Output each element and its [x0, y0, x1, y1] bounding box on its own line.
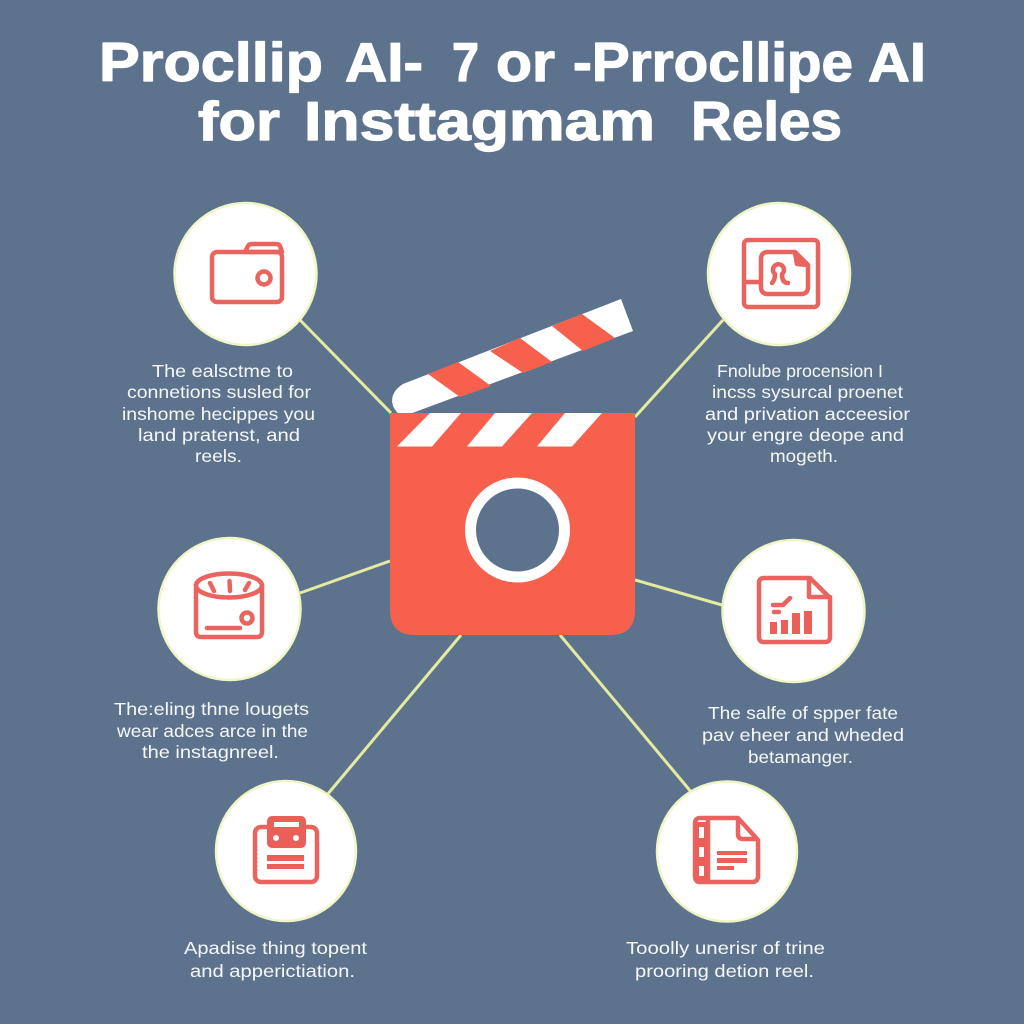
title: for [198, 90, 280, 152]
title: or [496, 31, 555, 93]
text block: middle right [702, 703, 904, 767]
text block: upper right [705, 361, 910, 466]
icon: folder [212, 244, 282, 302]
title: Insttagmam [304, 90, 655, 152]
text block: upper left: The ealsctme to [152, 361, 293, 381]
clapper body [390, 413, 635, 635]
icon: gauge drum [196, 574, 262, 637]
text block: middle left: wear adces arce in the [116, 721, 308, 741]
text block: middle left: The:eling thne lougets [114, 699, 309, 719]
node: clipboard [216, 781, 356, 921]
lens ring [470, 483, 564, 577]
node: framed document [708, 203, 850, 345]
central clapperboard [390, 299, 635, 635]
text block: lower left: Apadise thing topent [184, 938, 367, 958]
body stripes [397, 413, 602, 446]
node: gauge drum [158, 538, 300, 680]
text block: upper right: and privation acceesior [705, 404, 910, 424]
text block: upper left: inshome hecippes you [122, 404, 315, 424]
title [99, 31, 926, 152]
title: -Prrocllipe [573, 31, 853, 93]
clapper arm [392, 299, 633, 415]
icon: framed document [744, 240, 818, 307]
text block: lower right: Tooolly unerisr of trine [626, 938, 825, 958]
text block: upper left: connetions susled for [127, 382, 311, 402]
title: Reles [691, 90, 842, 152]
text block: upper right: Fnolube procension I [717, 361, 883, 381]
node: chart document [722, 540, 864, 682]
text block: upper right: mogeth. [770, 446, 838, 466]
text block: upper left: reels. [195, 446, 242, 466]
text block: lower right [626, 938, 825, 981]
text block: middle left: the instagnreel. [142, 742, 279, 762]
text block: middle left [114, 699, 309, 762]
text block: upper right: your engre deope and [707, 425, 904, 445]
title: AI- [345, 31, 423, 93]
text block: middle right: betamanger. [748, 747, 853, 767]
text block: upper left [122, 361, 315, 466]
text block: middle right: pav eheer and wheded [702, 725, 904, 745]
title: Procllip [99, 31, 323, 93]
node: folder [174, 203, 316, 345]
icon: chart document [759, 578, 830, 642]
icon: notebook document [695, 818, 758, 882]
connector lines [300, 320, 723, 795]
text block: upper left: land pratenst, and [138, 425, 300, 445]
node: notebook document [657, 782, 797, 922]
text block: lower left: and apperictiation. [190, 961, 355, 981]
text block: middle right: The salfe of spper fate [708, 703, 898, 723]
icon: clipboard [255, 816, 317, 882]
title: AI [868, 31, 926, 93]
text block: upper right: incss sysurcal proenet [712, 382, 903, 402]
text block: lower right: prooring detion reel. [635, 961, 814, 981]
title: 7 [452, 31, 479, 93]
text block: lower left [184, 938, 367, 981]
